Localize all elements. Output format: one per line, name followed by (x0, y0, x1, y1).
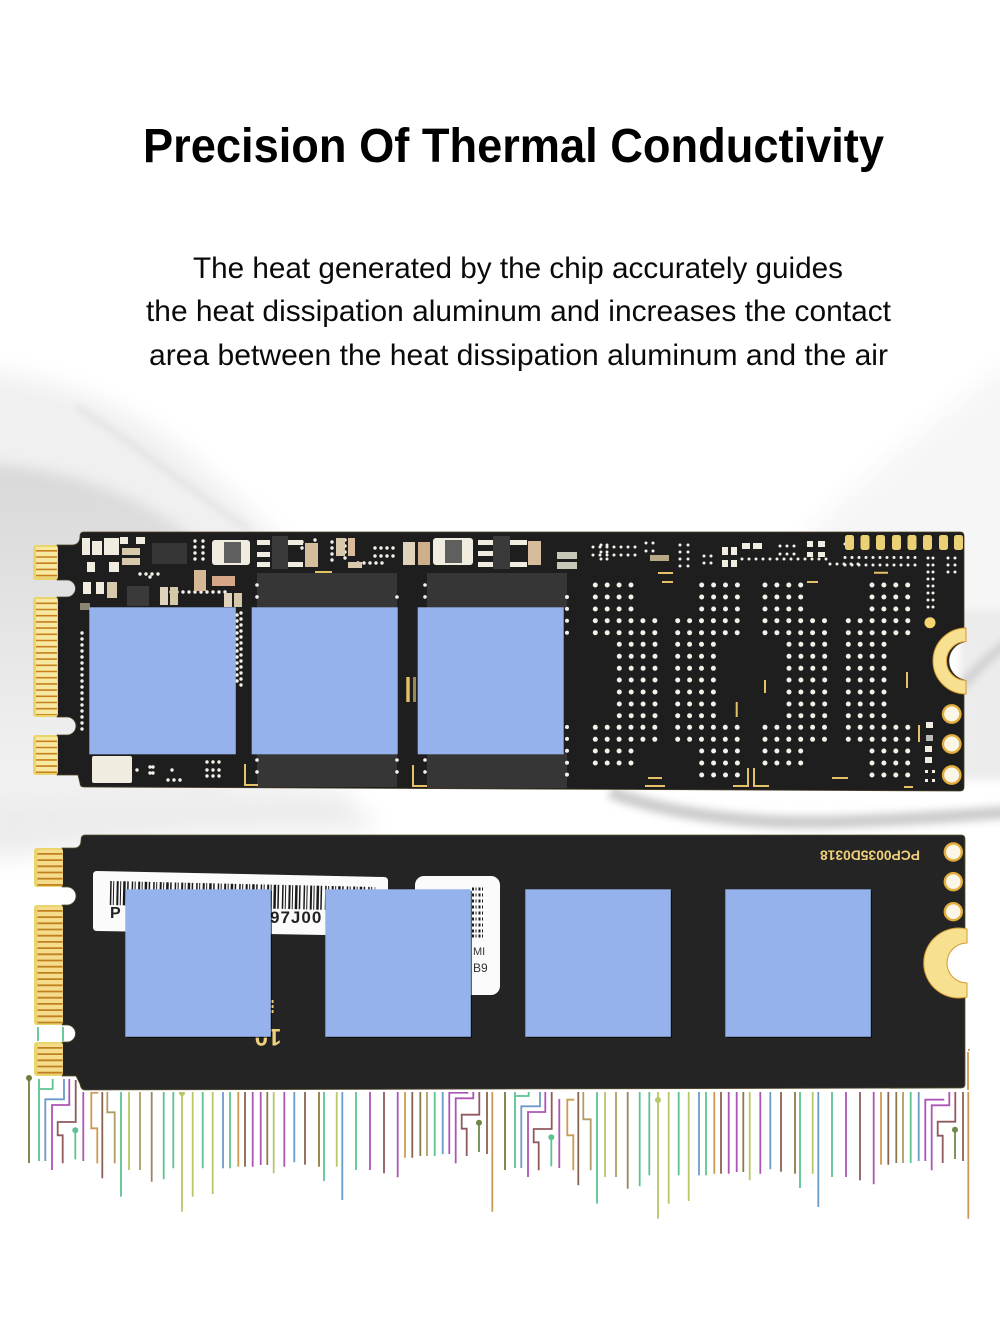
thermal pad 3 on front (418, 607, 564, 754)
data matrix label: B9 (473, 961, 488, 975)
thermal pad 1 on back (125, 889, 272, 1038)
front board body (57, 532, 964, 791)
description text: The heat generated by the chip accurately guides (193, 252, 843, 285)
panel: SSD back board (34, 835, 967, 1090)
front surface components (80, 536, 935, 783)
gold silk marks beside pad (270, 1000, 274, 1013)
description text (146, 252, 892, 372)
thermal pad 1 on front (89, 607, 236, 754)
description text: the heat dissipation aluminum and increases the contact (146, 295, 892, 328)
circuit traces, right half (502, 1082, 968, 1219)
front mounting holes (924, 617, 960, 784)
data matrix label (415, 876, 500, 995)
back board body (62, 835, 965, 1090)
thermal pad 4 on back (725, 889, 872, 1038)
barcode label: P (110, 905, 121, 922)
thermal pad 3 on back (525, 889, 672, 1038)
white gap under back board (84, 1087, 964, 1092)
panel: SSD front board (33, 532, 966, 791)
front gold connector fingers (33, 545, 58, 775)
barcode label: 97J00 (270, 908, 322, 927)
front top gold pads (845, 535, 963, 550)
front notch gold ring (933, 628, 966, 694)
back notch gold ring (924, 928, 967, 998)
thermal pad 2 on back (325, 889, 472, 1038)
thermal pad 2 on front (252, 607, 398, 754)
circuit trace, far right edge (968, 1050, 970, 1090)
description text: area between the heat dissipation aluminum and the air (149, 339, 888, 372)
data matrix label: MI (473, 946, 485, 958)
front gold marks (245, 572, 919, 787)
back gold connector fingers (34, 848, 63, 1076)
circuit traces visible in the connector notch (38, 1027, 63, 1041)
front solder dot grid (82, 540, 955, 780)
back mounting holes (945, 844, 962, 920)
barcode label (93, 871, 388, 935)
front memory chips (257, 573, 567, 788)
circuit traces, left half (26, 1075, 492, 1212)
upside-down serial print: PCP0035D0318 (820, 847, 920, 862)
title: Precision Of Thermal Conductivity (143, 120, 884, 173)
upside-down gold numeral: 10 (255, 1023, 281, 1050)
